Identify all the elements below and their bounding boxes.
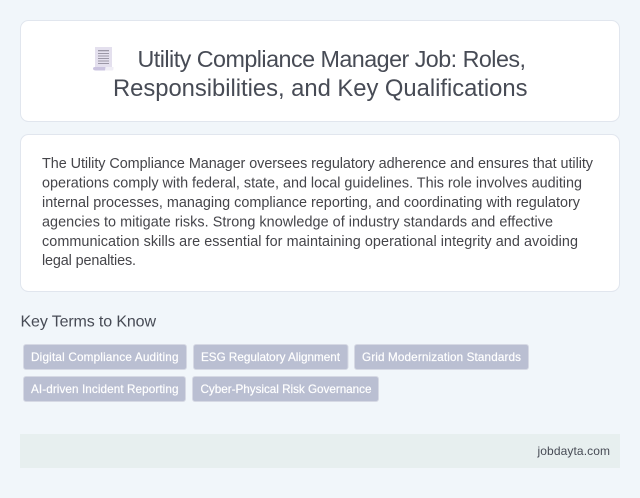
text block: description: The Utility Compliance Manager oversees regulatory adherence and ensures that utility — [42, 156, 594, 172]
panel: title card — [20, 20, 620, 122]
tag: Cyber-Physical Risk Governance — [192, 376, 378, 402]
tag list: key terms — [24, 344, 528, 402]
title: Utility Compliance Manager Job: Roles, — [138, 46, 526, 72]
tag: ESG Regulatory Alignment: ESG Regulatory Alignment — [201, 351, 341, 364]
heading: key terms: Key Terms to Know — [20, 314, 156, 330]
tag: Digital Compliance Auditing: Digital Compliance Auditing — [31, 351, 178, 364]
panel: description card — [20, 134, 620, 292]
text block: description: internal processes, managing compliance reporting, and coordinating with regulatory — [42, 195, 581, 211]
tag: Digital Compliance Auditing — [24, 344, 186, 370]
tag: Cyber-Physical Risk Governance: Cyber-Physical Risk Governance — [200, 383, 372, 396]
tag: ESG Regulatory Alignment — [194, 344, 348, 370]
title — [113, 46, 528, 102]
footer bar — [20, 434, 620, 468]
text block: description: legal penalties. — [42, 253, 136, 269]
text block: description: communication skills are essential for maintaining operational integrity and avoiding — [42, 234, 578, 250]
text block: description: operations comply with federal, state, and local guidelines. This role involves auditing — [42, 176, 582, 192]
footer text: jobdayta.com: jobdayta.com — [536, 444, 610, 458]
title: Responsibilities, and Key Qualifications — [113, 75, 528, 102]
text block: description: agencies to mitigate risks. Strong knowledge of industry standards and effective — [42, 214, 553, 230]
icon: document scroll — [93, 47, 114, 70]
text block: description — [42, 156, 594, 269]
tag: AI-driven Incident Reporting — [24, 376, 186, 402]
tag: AI-driven Incident Reporting: AI-driven Incident Reporting — [31, 383, 178, 396]
tag: Grid Modernization Standards — [354, 344, 528, 370]
tag: Grid Modernization Standards: Grid Modernization Standards — [362, 351, 521, 364]
